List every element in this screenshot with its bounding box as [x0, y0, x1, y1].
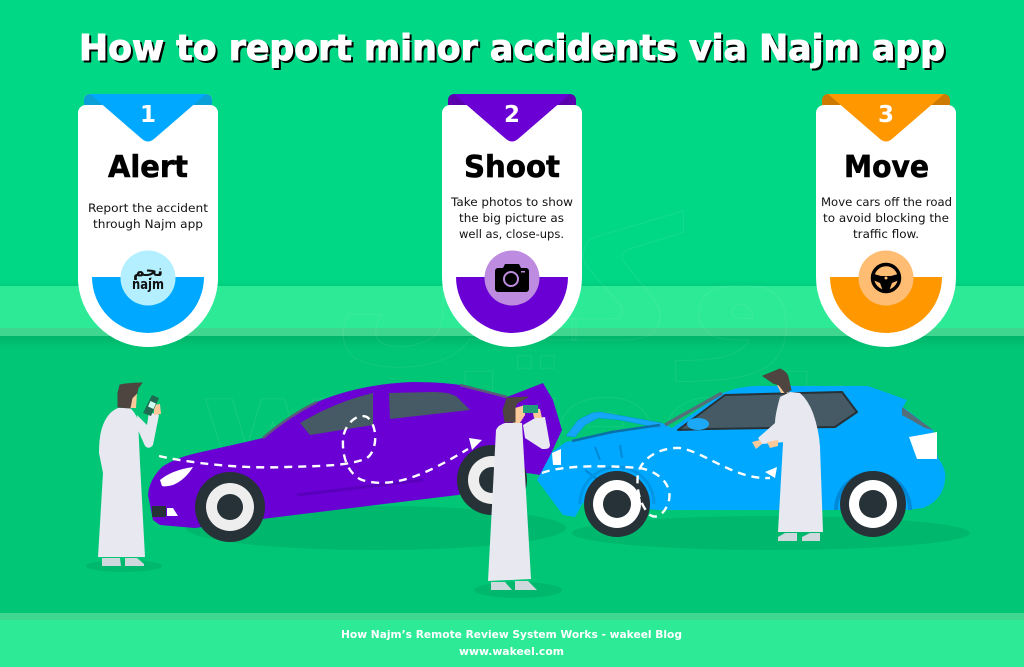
card face 3 [816, 105, 956, 347]
number badge 2 [454, 94, 570, 142]
text: step 1 description [88, 201, 209, 231]
front wheel [584, 471, 650, 537]
panel: step 2 Shoot [442, 94, 582, 347]
rear wheel [457, 445, 527, 515]
text: step 2 description [450, 195, 573, 241]
heading: Alert: Alert [108, 150, 188, 185]
phone [143, 395, 159, 416]
icon: najm logo: نجم [133, 261, 163, 280]
card face 2 [442, 105, 582, 347]
panel: step 3 Move [816, 94, 956, 347]
text: step 3 description: traffic flow. [853, 227, 919, 241]
footer text: How Najm’s Remote Review System Works - wakeel Blog [341, 628, 682, 641]
heading: Shoot: Shoot [464, 150, 560, 185]
text: step 3 description: to avoid blocking the [823, 211, 949, 225]
front wheel [195, 472, 265, 542]
text: step 2 description: the big picture as [459, 211, 564, 225]
dashed arrow 1 [159, 416, 482, 483]
icon: najm logo [120, 250, 176, 306]
person 2 taking photo [488, 397, 550, 590]
watermark [200, 183, 820, 501]
tab corners 3 [822, 94, 950, 106]
tab corners 1 [84, 94, 212, 106]
icon: steering wheel [858, 250, 914, 306]
semicircle 2 [456, 277, 568, 333]
text: step 3 description: Move cars off the road [821, 195, 952, 209]
rear wheel [840, 471, 906, 537]
number badge 3: 3 [878, 102, 894, 128]
text: step 1 description: through Najm app [93, 217, 203, 231]
icon: camera [484, 250, 540, 306]
camera phone [523, 405, 538, 413]
ground shadows [86, 506, 970, 598]
text: step 3 description [821, 195, 952, 241]
footer text: www.wakeel.com [459, 645, 564, 658]
title: How to report minor accidents via Najm app [81, 30, 947, 71]
text: step 2 description: Take photos to show [450, 195, 573, 209]
number badge 1: 1 [140, 102, 156, 128]
tab corners 2 [448, 94, 576, 106]
icon: najm logo: najm [132, 277, 164, 293]
person 3 [752, 369, 823, 541]
title: How to report minor accidents via Najm app [79, 28, 945, 69]
blue car [537, 386, 945, 537]
watermark: وكيل [330, 183, 800, 382]
card face 1 [78, 105, 218, 347]
number badge 3 [828, 94, 944, 142]
footer text [341, 628, 682, 658]
number badge 1 [90, 94, 206, 142]
dashed arrow 2 [542, 448, 777, 517]
person 1 with phone [98, 383, 161, 566]
purple car [148, 382, 562, 542]
text: step 2 description: well as, close-ups. [459, 227, 564, 241]
text: step 1 description: Report the accident [88, 201, 209, 215]
watermark: wakeel [200, 349, 820, 501]
number badge 2: 2 [504, 102, 520, 128]
card shape 1 [78, 94, 218, 347]
semicircle 1 [92, 277, 204, 333]
panel: step 1 Alert [78, 94, 218, 347]
heading: Move: Move [844, 150, 929, 185]
semicircle 3 [830, 277, 942, 333]
